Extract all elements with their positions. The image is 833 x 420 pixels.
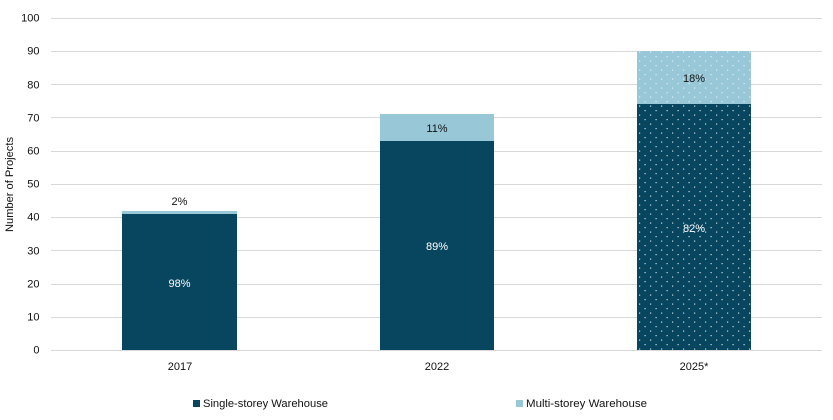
bar: 2025 projected: 18% [683, 73, 705, 85]
y-axis tick labels: 30 [27, 246, 40, 258]
y-axis tick labels [21, 12, 40, 356]
x-axis labels [168, 361, 709, 373]
x-axis labels: 2017 [168, 361, 192, 373]
y-axis tick labels: 10 [27, 312, 40, 324]
y-axis tick labels: 0 [33, 344, 40, 356]
bar: 2017: 2% [172, 196, 188, 208]
y-axis tick labels: 40 [27, 212, 40, 224]
bar: 2025 projected: 82% [683, 223, 705, 235]
bar: 2025 projected [637, 51, 751, 350]
bar: 2022: 11% [426, 123, 448, 135]
legend: single-storey warehouse: Single-storey Warehouse [203, 398, 328, 410]
legend: multi-storey warehouse: Multi-storey Warehouse [526, 398, 647, 410]
bar: 2022: 89% [426, 241, 448, 253]
x-axis labels: 2025* [680, 361, 709, 373]
x-axis labels: 2022 [425, 361, 449, 373]
bar: 2017 [122, 196, 237, 350]
y-axis tick labels: 60 [27, 146, 40, 158]
grid lines [51, 18, 822, 350]
y-axis tick labels: 50 [27, 178, 40, 190]
y-axis tick labels: 90 [27, 46, 40, 58]
y-axis tick labels: 20 [27, 278, 40, 290]
y-axis tick labels: 80 [27, 80, 40, 92]
y-axis tick labels: 70 [27, 112, 40, 124]
bar: 2022 [380, 114, 494, 350]
y-axis title: Number of Projects [4, 137, 16, 232]
y-axis tick labels: 100 [21, 12, 40, 24]
bar: 2017: 98% [168, 278, 191, 290]
